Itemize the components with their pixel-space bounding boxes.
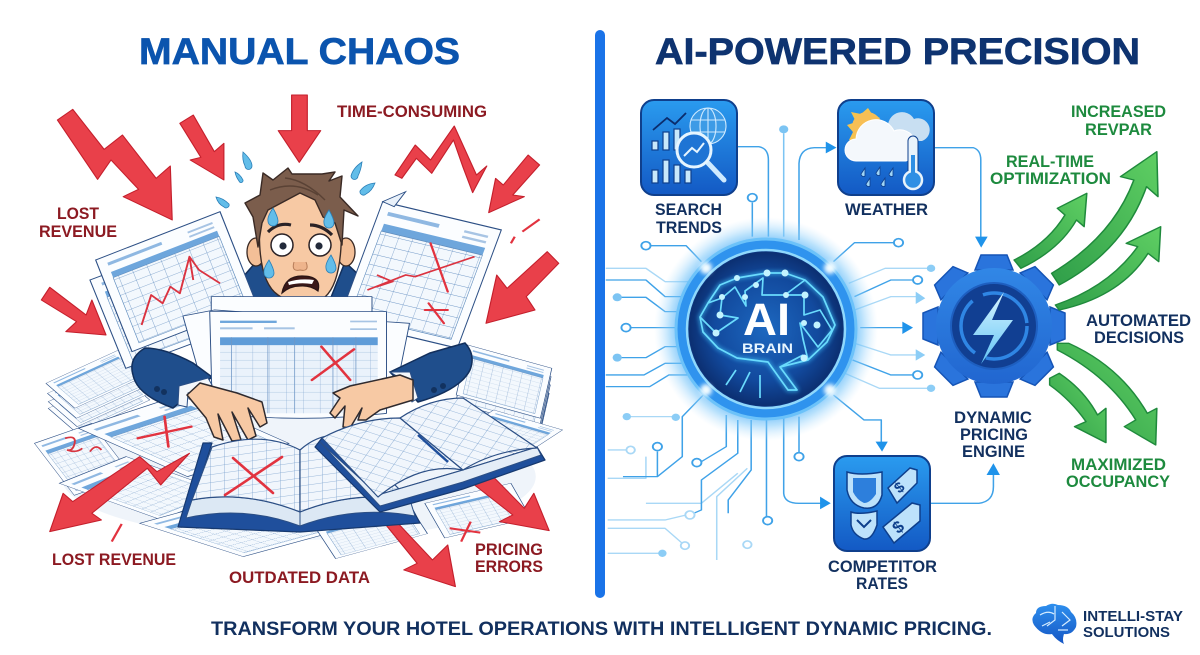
panel: large tilted sheets <box>90 192 501 400</box>
label: dynamic pricing engine <box>954 408 1032 461</box>
ribbon <box>418 435 448 462</box>
red arrow: bottom right <box>475 473 549 531</box>
red arrow: right <box>486 252 559 323</box>
price tag upper <box>888 468 917 503</box>
left ear <box>247 238 265 266</box>
red arrow: bottom-left lightning <box>50 453 189 532</box>
title: ai-powered precision: AI-POWERED PRECISION <box>655 31 1140 72</box>
right hand <box>330 375 413 428</box>
green output arrows <box>1014 152 1161 445</box>
light traces <box>606 265 935 560</box>
ring nodes <box>700 262 836 396</box>
label: outdated data: OUTDATED DATA <box>229 568 370 587</box>
paper stack right <box>454 345 552 443</box>
open book center <box>178 436 420 532</box>
main traces <box>606 125 993 525</box>
thermometer <box>908 136 918 184</box>
label: pricing errors: PRICING <box>475 540 543 559</box>
label: maximized occupancy: MAXIMIZED <box>1071 455 1166 474</box>
red marks <box>112 219 540 542</box>
icon box: search trends <box>641 100 737 195</box>
red arrows around the worker <box>41 95 559 542</box>
label: automated decisions: DECISIONS <box>1094 328 1184 347</box>
dynamic pricing engine gear <box>923 255 1065 397</box>
hands <box>178 372 418 441</box>
front cloud <box>845 120 916 161</box>
right sleeve <box>390 343 472 402</box>
red arrows under books <box>50 453 549 587</box>
label: increased revpar: INCREASED <box>1071 102 1166 121</box>
AI wordmark: AI <box>743 294 790 345</box>
label: pricing errors: ERRORS <box>475 557 543 576</box>
left sleeve <box>132 348 212 408</box>
label: lost revenue top: LOST <box>57 204 100 223</box>
label: increased revpar <box>1071 102 1166 139</box>
bars <box>652 129 691 183</box>
lightning bolt <box>973 292 1013 364</box>
open book right <box>315 398 545 512</box>
label: maximized occupancy: OCCUPANCY <box>1066 472 1171 491</box>
label: search trends <box>655 200 722 237</box>
magnifier <box>708 163 724 180</box>
red arrow: bottom center <box>385 523 455 587</box>
arrow down large <box>1057 343 1157 445</box>
center book left page <box>192 439 300 512</box>
label: automated decisions <box>1086 311 1191 347</box>
right book right page <box>400 398 537 470</box>
label: real-time optimization: OPTIMIZATION <box>990 169 1111 188</box>
sheet with chart on left <box>90 212 256 368</box>
label: lost revenue top <box>39 204 117 241</box>
rising trend line <box>653 113 686 130</box>
label: lost revenue bottom: LOST REVENUE <box>52 550 176 569</box>
arms <box>132 343 472 408</box>
arrow up large <box>1052 152 1158 285</box>
left cuff <box>178 378 212 407</box>
label: pricing errors <box>475 540 543 576</box>
red x on sheet <box>138 417 191 447</box>
globe <box>690 108 726 144</box>
red arrow: upper right <box>489 155 540 213</box>
red arrow: top center <box>278 95 321 162</box>
label: maximized occupancy <box>1066 455 1171 491</box>
rain drops <box>861 167 893 187</box>
shields <box>847 472 882 508</box>
arrow down small <box>1050 373 1106 443</box>
icon box: competitor rates: $ <box>889 517 908 538</box>
sheet with crosses on right <box>339 192 501 348</box>
scribble on sheet <box>65 437 101 452</box>
man's suit and head <box>216 152 375 335</box>
hair sweep detail <box>270 178 325 200</box>
label: automated decisions: AUTOMATED <box>1086 311 1191 330</box>
label: increased revpar: REVPAR <box>1085 120 1152 139</box>
tagline: TRANSFORM YOUR HOTEL OPERATIONS WITH INTELLIGENT DYNAMIC PRICING. <box>211 619 992 640</box>
label: time-consuming: TIME-CONSUMING <box>337 102 487 121</box>
panel: paper pile background <box>34 345 563 559</box>
ai brain core <box>654 217 878 441</box>
center book red x <box>225 457 282 495</box>
icon: logo brain <box>1032 604 1076 644</box>
hair <box>245 168 358 247</box>
suit shoulders <box>232 262 372 335</box>
label: search trends: TRENDS <box>656 218 722 237</box>
right book cover <box>315 438 545 512</box>
back cloud <box>888 112 930 141</box>
outer glow <box>654 217 878 441</box>
icon box: weather <box>838 100 934 195</box>
shadow under paper pile <box>61 413 536 540</box>
title: manual chaos: MANUAL CHAOS <box>139 31 460 72</box>
logo: intelli-stay solutions <box>1032 604 1183 644</box>
red arrow: top-left small <box>180 115 224 180</box>
sun <box>847 108 880 142</box>
trace arrowheads <box>820 142 1000 509</box>
scattered sheets <box>34 395 563 559</box>
gear teeth <box>923 255 1065 397</box>
panel: center spreadsheet <box>210 312 387 418</box>
label: real-time optimization: REAL-TIME <box>1006 152 1094 171</box>
center book right page <box>300 436 410 512</box>
red arrow: top-left lightning <box>57 109 172 220</box>
center book cover <box>178 443 420 532</box>
back center sheet <box>183 297 409 400</box>
icon box: competitor rates <box>834 456 930 551</box>
brain network <box>700 273 835 398</box>
price tag lower <box>883 503 920 543</box>
label: competitor rates <box>828 557 937 593</box>
paper stack left <box>46 350 150 433</box>
right book left page <box>322 418 463 497</box>
label: lost revenue top: REVENUE <box>39 222 117 241</box>
left hand <box>187 383 267 441</box>
brain network glow <box>700 273 835 390</box>
label: real-time optimization <box>990 152 1111 188</box>
nose <box>293 262 307 270</box>
logo wordmark: SOLUTIONS <box>1083 624 1170 641</box>
eyes <box>271 234 293 256</box>
face <box>259 185 341 304</box>
arrow up small <box>1014 193 1087 268</box>
label: dynamic pricing engine: PRICING <box>960 425 1028 444</box>
eyebrows <box>268 224 332 235</box>
outer ring <box>676 239 856 419</box>
arrow up lower <box>1055 227 1161 310</box>
right book page edges <box>320 442 541 506</box>
label: competitor rates: COMPETITOR <box>828 557 937 576</box>
label: dynamic pricing engine: ENGINE <box>962 442 1025 461</box>
label: weather: WEATHER <box>845 200 928 219</box>
label: dynamic pricing engine: DYNAMIC <box>954 408 1032 427</box>
icon box: competitor rates: $ <box>891 478 909 497</box>
red arrow: left <box>41 287 106 335</box>
gear body <box>936 268 1052 384</box>
gear hub <box>951 283 1037 369</box>
sweat drops <box>216 152 375 278</box>
mouth <box>282 276 319 293</box>
center book page edges <box>186 497 415 526</box>
label: competitor rates: RATES <box>856 574 908 593</box>
label: search trends: SEARCH <box>655 200 722 219</box>
BRAIN wordmark: BRAIN <box>742 340 793 356</box>
red zigzag arrow <box>395 126 487 193</box>
right cuff <box>390 372 418 402</box>
logo wordmark: INTELLI-STAY <box>1083 608 1183 625</box>
divider between panels <box>595 30 605 598</box>
logo wordmark <box>1083 608 1183 641</box>
cuff buttons <box>154 386 160 392</box>
right ear <box>337 238 355 266</box>
circuit network <box>606 125 1000 560</box>
inner disc <box>689 252 843 406</box>
